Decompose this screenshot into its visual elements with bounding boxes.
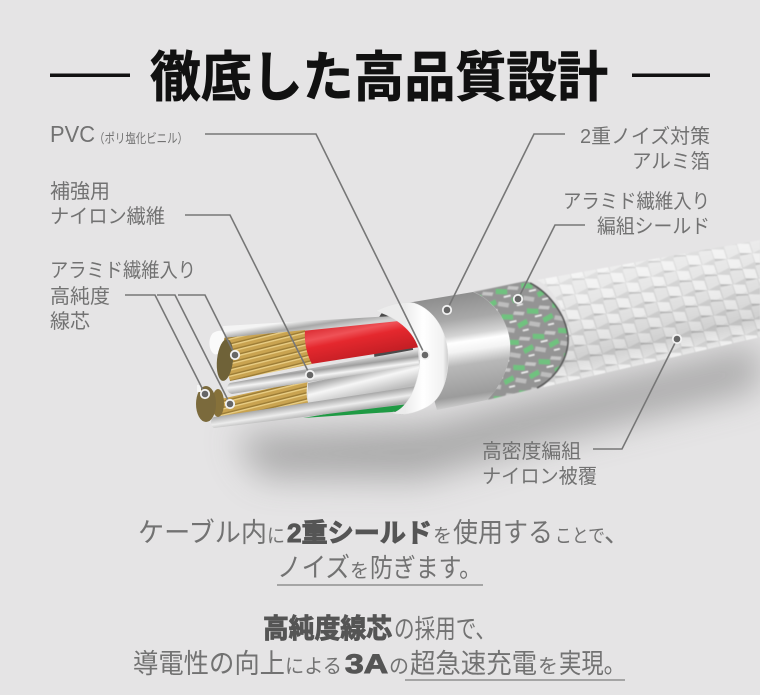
large silver wire [308, 360, 420, 407]
label: reinforcing nylon [50, 180, 165, 228]
leader lines [125, 134, 677, 449]
label: high purity core: 線芯 [50, 310, 90, 333]
aluminium foil layer [407, 292, 510, 410]
caption: double shield: 使用する [453, 518, 553, 548]
caption: high purity conductor: を [538, 656, 558, 678]
cable cast shadow [235, 345, 760, 478]
outer nylon braid [537, 240, 760, 388]
caption: double shield: を [433, 526, 452, 547]
label: PVC: PVC [50, 121, 95, 147]
caption: double shield: ケーブル内 [138, 518, 267, 548]
label: aramid braided shield: アラミド繊維入り [563, 190, 710, 213]
label: PVC [50, 121, 188, 147]
label: reinforcing nylon: 補強用 [50, 180, 110, 203]
caption: high purity conductor: の [389, 656, 409, 678]
aramid braided shield [473, 281, 568, 400]
label: PVC: （ポリ塩化ビニル） [94, 131, 188, 146]
label: aramid braided shield: 編組シールド [597, 215, 710, 238]
caption: double shield: ノイズ [277, 553, 350, 583]
upper gold conductor [222, 330, 312, 381]
caption: double shield: ことで [555, 526, 605, 547]
caption: double shield: を [350, 561, 369, 582]
upper conductor sheath [223, 316, 399, 339]
label: dense braided nylon: ナイロン被覆 [482, 465, 597, 488]
caption: high purity conductor: 導電性の向上 [133, 649, 285, 679]
label: reinforcing nylon: ナイロン繊維 [50, 205, 165, 228]
caption: high purity conductor: による [285, 656, 342, 678]
dark hole behind ring [368, 307, 422, 417]
PVC ring [376, 303, 448, 414]
caption: double shield [138, 518, 630, 586]
caption: high purity conductor [133, 614, 626, 681]
caption: high purity conductor: 超急速充電 [410, 649, 537, 679]
red wire [302, 316, 420, 364]
caption: double shield: 、 [604, 518, 630, 548]
label: double noise foil: 2重ノイズ対策 [580, 125, 710, 148]
label: high purity core: 高純度 [50, 285, 110, 308]
leader pins [201, 295, 681, 408]
lower silver rod [211, 386, 417, 428]
label: high purity core: アラミド繊維入り [50, 259, 196, 282]
lower gold conductor [216, 380, 309, 417]
label: dense braided nylon: 高密度編組 [482, 440, 581, 463]
label: double noise foil: アルミ箔 [632, 150, 710, 173]
title with side rules: 徹底した高品質設計 [150, 48, 608, 108]
caption: double shield: 防ぎます。 [370, 553, 482, 583]
green wire [303, 399, 416, 418]
lower strand cut ends [196, 385, 224, 422]
caption: high purity conductor: 実現。 [559, 649, 626, 679]
cable illustration [196, 240, 760, 478]
caption: high purity conductor: 3A [345, 649, 388, 679]
label: aramid braided shield [563, 190, 710, 238]
reinforcing nylon rod [227, 349, 419, 394]
label: high purity core [50, 259, 196, 333]
label: dense braided nylon [482, 440, 597, 488]
label: double noise foil [580, 125, 710, 173]
caption: double shield: 2重シールド [287, 518, 432, 548]
upper strand cut end [209, 331, 235, 382]
caption: high purity conductor: 高純度線芯 [263, 614, 392, 644]
caption: double shield: に [267, 526, 285, 547]
caption: high purity conductor: の採用で、 [394, 614, 496, 644]
